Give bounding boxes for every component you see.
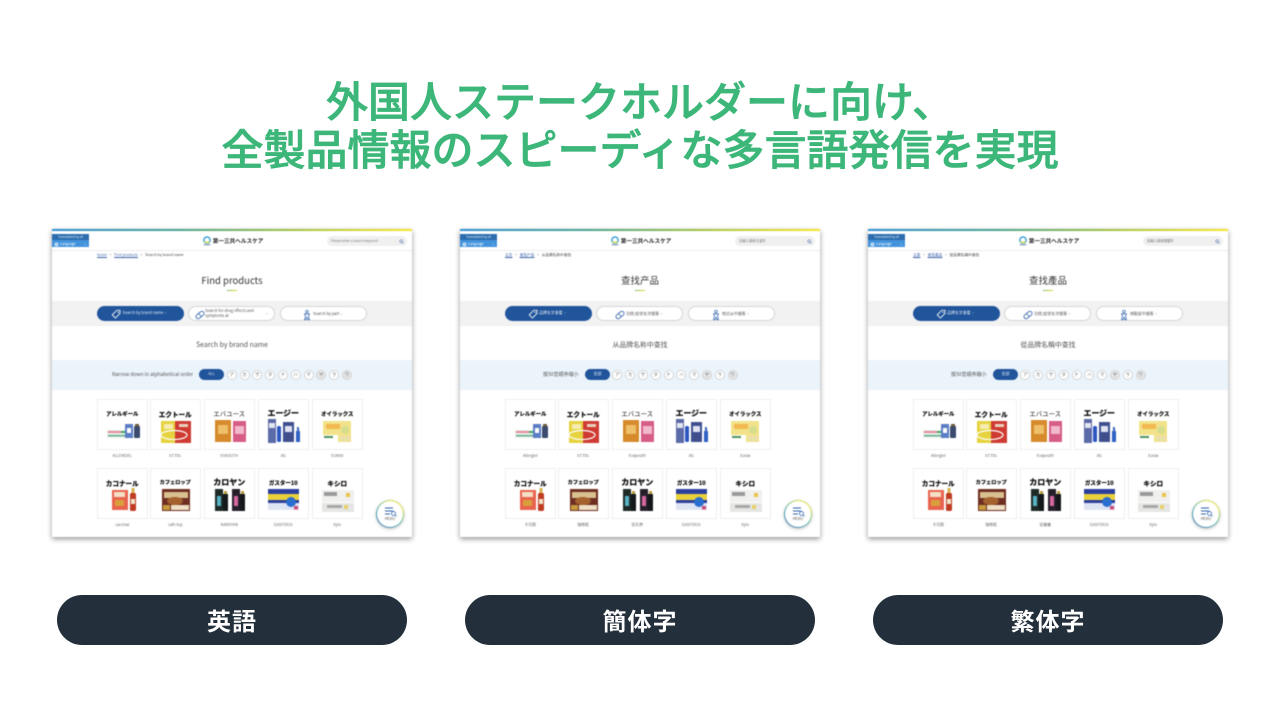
product: Xylo <box>1128 468 1179 528</box>
product: Ectol: エクトール <box>975 408 1008 418</box>
alphabetical filter: サ <box>641 372 645 378</box>
product: Karoyan: 佳樂養 <box>1039 522 1051 528</box>
product: Eurax: Eurax <box>1148 453 1158 459</box>
product: Ectol <box>558 399 609 459</box>
product: Ectol: ECTOL <box>577 453 589 459</box>
panel: Simplified Chinese site screenshot: 第一三共ヘルスケア <box>621 236 671 244</box>
product: Xylo <box>720 468 771 528</box>
alphabetical filter: Narrow down in alphabetical order <box>112 371 193 378</box>
translation language selector: ⌄ <box>900 241 903 246</box>
title: 外国人ステークホルダーに向け、 <box>326 69 954 130</box>
product: Gaster10 <box>1074 468 1125 528</box>
button: search by effects and symptoms <box>1004 306 1091 321</box>
product: Karoyan: カロヤン <box>1029 476 1061 488</box>
product: Gaster10: ガスター10 <box>269 478 298 486</box>
alphabetical filter: ヤ <box>705 372 709 378</box>
product: Kakonal <box>913 468 964 528</box>
product: Allergiel: アレルギール <box>514 410 546 418</box>
product: Kakonal: カコナール <box>106 478 139 488</box>
product: Evayouth: EVAOUTH <box>220 453 238 459</box>
alphabetical filter: ナ <box>666 372 671 378</box>
product: AG: エージー <box>268 408 299 418</box>
button: search by effects and symptoms: 功效/症狀名字搜索 › <box>1034 311 1070 317</box>
product: Cafe drop: カフェロップ <box>568 478 599 486</box>
product: Cafe drop <box>966 468 1017 528</box>
title <box>221 69 1059 178</box>
search box <box>735 236 815 246</box>
section heading: 從品牌名稱中查找 <box>1020 339 1076 349</box>
alphabetical filter: ラ <box>332 372 336 378</box>
alphabetical filter: ア <box>229 372 234 378</box>
product: Eurax: オイラックス <box>321 410 353 418</box>
alphabetical filter <box>112 368 352 381</box>
product: Evayouth <box>204 399 255 459</box>
search box: 請輸入搜索關鍵字 <box>1147 238 1174 243</box>
alphabetical filter: タ <box>268 372 272 378</box>
button: search by part <box>280 306 367 321</box>
product: Cafe drop <box>150 468 201 528</box>
alphabetical filter: ワ <box>345 372 349 378</box>
product: Evayouth: Evayouth <box>1037 453 1054 459</box>
product: Karoyan <box>1020 468 1071 528</box>
button: search by drug effects: symptoms at <box>205 313 229 319</box>
button: search by part: 地點從中搜索 › <box>1130 311 1157 317</box>
alphabetical filter: 全部 <box>594 371 602 377</box>
product: Karoyan: カロヤン <box>621 476 653 488</box>
button: search by part <box>1096 306 1183 321</box>
translation language selector <box>868 234 905 247</box>
product: Evayouth: エバユース <box>213 408 245 418</box>
label: Simplified Chinese: 簡体字 <box>602 602 678 637</box>
product: Ectol: エクトール <box>159 408 192 418</box>
product: Xylo: Xylo <box>741 522 749 528</box>
product: Kakonal: caconal <box>115 522 129 528</box>
title: 全製品情報のスピーディな多言語発信を実現 <box>221 117 1059 178</box>
product: Eurax: オイラックス <box>1137 410 1169 418</box>
alphabetical filter: マ <box>306 372 311 378</box>
product: Allergiel: アレルギール <box>106 410 138 418</box>
label: English <box>57 595 407 645</box>
product: Allergiel: Allergiel <box>523 453 538 459</box>
section heading: 从品牌名称中查找 <box>612 339 668 349</box>
product: Allergiel <box>505 399 556 459</box>
alphabetical filter: ALL <box>208 371 215 377</box>
product: Karoyan <box>612 468 663 528</box>
product: Ectol: ECTOL <box>985 453 997 459</box>
menu button <box>1192 500 1220 528</box>
product: AG <box>1074 399 1125 459</box>
product: Cafe drop: カフェロップ <box>160 478 191 486</box>
alphabetical filter: マ <box>692 372 696 378</box>
label: Traditional Chinese <box>873 595 1223 645</box>
product: Kakonal: カコナール <box>922 478 955 488</box>
brand logo <box>202 236 212 246</box>
product: AG <box>666 399 717 459</box>
product: Gaster10: GASTER10 <box>682 522 701 528</box>
product: Kakonal: 卡可那 <box>932 522 944 528</box>
product: AG <box>258 399 309 459</box>
product: Evayouth: エバユース <box>1029 408 1061 418</box>
product: Eurax: EURAX <box>331 453 343 459</box>
product: Karoyan: カロヤン <box>213 476 245 488</box>
product: Karoyan <box>204 468 255 528</box>
label: Simplified Chinese <box>465 595 815 645</box>
product: Eurax <box>312 399 363 459</box>
alphabetical filter: サ <box>1049 372 1053 378</box>
breadcrumb: 主頁 > 查找產品 > 從品牌名稱中查找 <box>913 253 979 258</box>
button: search by effects and symptoms <box>596 306 683 321</box>
translation language selector <box>52 234 89 247</box>
menu button: MENU <box>385 517 395 522</box>
product: Cafe drop: 咖啡粒 <box>985 522 997 528</box>
alphabetical filter: タ <box>1061 372 1066 378</box>
translation language selector: ⌄ <box>492 241 495 246</box>
product: Cafe drop <box>558 468 609 528</box>
brand logo <box>1018 236 1028 246</box>
alphabetical filter: カ <box>628 372 632 378</box>
product: Evayouth: エバユース <box>621 408 653 418</box>
button: search by part: 地点从中搜索 › <box>722 311 749 317</box>
search box: 请输入搜索关键字 <box>739 238 766 243</box>
product: Ectol <box>150 399 201 459</box>
alphabetical filter: ハ <box>293 372 298 378</box>
menu button <box>784 500 812 528</box>
alphabetical filter: ア <box>1023 372 1028 378</box>
product: Xylo: Xylo <box>1149 522 1157 528</box>
alphabetical filter: サ <box>255 372 260 378</box>
panel: Traditional Chinese site screenshot: 第一三共ヘルスケア <box>1029 236 1079 244</box>
alphabetical filter: ワ <box>1138 372 1143 378</box>
button: search by drug effects: Search for drug effects and <box>205 308 254 314</box>
alphabetical filter: ハ <box>1087 372 1092 378</box>
translation language selector: ⌄ <box>84 241 87 246</box>
translation language selector: Language <box>60 241 75 246</box>
alphabetical filter <box>542 368 738 381</box>
alphabetical filter: カ <box>1036 372 1040 378</box>
panel: English site screenshot <box>52 229 412 537</box>
button: search by brand name <box>913 306 1000 321</box>
product: Ectol: エクトール <box>567 408 600 418</box>
breadcrumb: home > Find products > Search by brand name <box>97 253 184 258</box>
alphabetical filter: 按50音順序縮小 <box>951 371 987 378</box>
button: search by drug effects <box>188 306 275 321</box>
alphabetical filter: カ <box>242 372 247 378</box>
product: Allergiel: ALLERGIEL <box>112 453 132 459</box>
alphabetical filter: ラ <box>717 372 722 378</box>
product: Eurax: Eurax <box>740 453 750 459</box>
search box <box>327 236 407 246</box>
translation language selector: Language <box>876 241 891 246</box>
page title: 查找產品 <box>1029 273 1067 287</box>
product: AG: AG <box>281 453 286 459</box>
product: Gaster10: GASTER10 <box>1090 522 1109 528</box>
product: AG: AG <box>689 453 694 459</box>
button: search by part: Search by part › <box>313 311 342 317</box>
product: Eurax <box>720 399 771 459</box>
product: Kakonal: カコナール <box>514 478 547 488</box>
product: Evayouth <box>612 399 663 459</box>
product: Gaster10: GASTER10 <box>274 522 293 528</box>
translation language selector <box>460 234 497 247</box>
panel: English site screenshot: 第一三共ヘルスケア <box>213 236 263 244</box>
product: Evayouth: Evayouth <box>629 453 646 459</box>
button: search by brand name <box>505 306 592 321</box>
label: Traditional Chinese: 繁体字 <box>1010 602 1086 637</box>
product: AG: エージー <box>676 408 707 418</box>
alphabetical filter: ヤ <box>1113 372 1117 378</box>
product: AG: エージー <box>1084 408 1115 418</box>
product: Xylo: Xylo <box>333 522 341 528</box>
button: search by drug effects: › <box>266 311 267 317</box>
product: Xylo: キシロ <box>327 478 347 488</box>
product: Gaster10: ガスター10 <box>1085 478 1114 486</box>
translation language selector: Translated by AI <box>466 234 491 239</box>
product: Cafe drop: 咖啡粒 <box>577 522 589 528</box>
alphabetical filter: ラ <box>1125 372 1130 378</box>
product: Kakonal <box>505 468 556 528</box>
button: search by part <box>688 306 775 321</box>
label: English: 英語 <box>207 602 257 637</box>
product: Xylo: キシロ <box>735 478 755 488</box>
product: AG: AG <box>1097 453 1102 459</box>
product: Allergiel: Allergiel <box>931 453 946 459</box>
search box: Please enter a search keyword <box>331 238 378 243</box>
page title: Find products <box>201 273 263 287</box>
alphabetical filter <box>950 368 1146 381</box>
button: search by brand name <box>97 306 184 321</box>
brand logo <box>610 236 620 246</box>
button: search by effects and symptoms: 功效/症状名字搜索 › <box>626 311 662 317</box>
product: Cafe drop: カフェロップ <box>976 478 1007 486</box>
translation language selector: Translated by AI <box>874 234 899 239</box>
alphabetical filter: ナ <box>1074 372 1079 378</box>
alphabetical filter: マ <box>1100 372 1104 378</box>
product: Allergiel: アレルギール <box>922 410 954 418</box>
product: Kakonal: 卡可那 <box>524 522 536 528</box>
alphabetical filter: ナ <box>281 372 285 378</box>
product: Allergiel <box>97 399 148 459</box>
button: search by brand name: 品牌名字查看 › <box>947 310 974 316</box>
product: Ectol <box>966 399 1017 459</box>
section heading: Search by brand name <box>196 339 268 349</box>
product: Kakonal <box>97 468 148 528</box>
alphabetical filter: 全部 <box>1002 371 1010 377</box>
breadcrumb: 主页 > 查找产品 > 从品牌名称中查找 <box>505 253 571 258</box>
alphabetical filter: 按50音顺序缩小 <box>543 371 579 378</box>
alphabetical filter: ヤ <box>319 372 324 378</box>
translation language selector: Translated by AI <box>58 234 83 239</box>
product: Eurax <box>1128 399 1179 459</box>
search box <box>1143 236 1223 246</box>
menu button: MENU <box>1201 517 1211 522</box>
button: search by brand name: 品牌名字查看 › <box>539 310 566 316</box>
alphabetical filter: タ <box>653 372 658 378</box>
menu button <box>376 500 404 528</box>
alphabetical filter: ワ <box>730 372 735 378</box>
button: search by brand name: Search by brand name › <box>122 310 166 316</box>
product: Ectol: ECTOL <box>169 453 181 459</box>
product: Xylo: キシロ <box>1143 478 1163 488</box>
product: Karoyan: KAROYAN <box>221 522 238 528</box>
page title: 查找产品 <box>621 273 659 287</box>
panel: Simplified Chinese site screenshot <box>460 229 820 537</box>
translation language selector: Language <box>468 241 483 246</box>
product: Cafe drop: cafe top <box>168 522 183 528</box>
product: Gaster10 <box>666 468 717 528</box>
product: Allergiel <box>913 399 964 459</box>
product: Gaster10 <box>258 468 309 528</box>
alphabetical filter: ハ <box>679 372 684 378</box>
product: Xylo <box>312 468 363 528</box>
product: Evayouth <box>1020 399 1071 459</box>
alphabetical filter: ア <box>615 372 620 378</box>
product: Gaster10: ガスター10 <box>677 478 706 486</box>
menu button: MENU <box>793 517 803 522</box>
panel: Traditional Chinese site screenshot <box>868 229 1228 537</box>
product: Eurax: オイラックス <box>729 410 761 418</box>
product: Karoyan: 佳乐养 <box>631 522 643 528</box>
